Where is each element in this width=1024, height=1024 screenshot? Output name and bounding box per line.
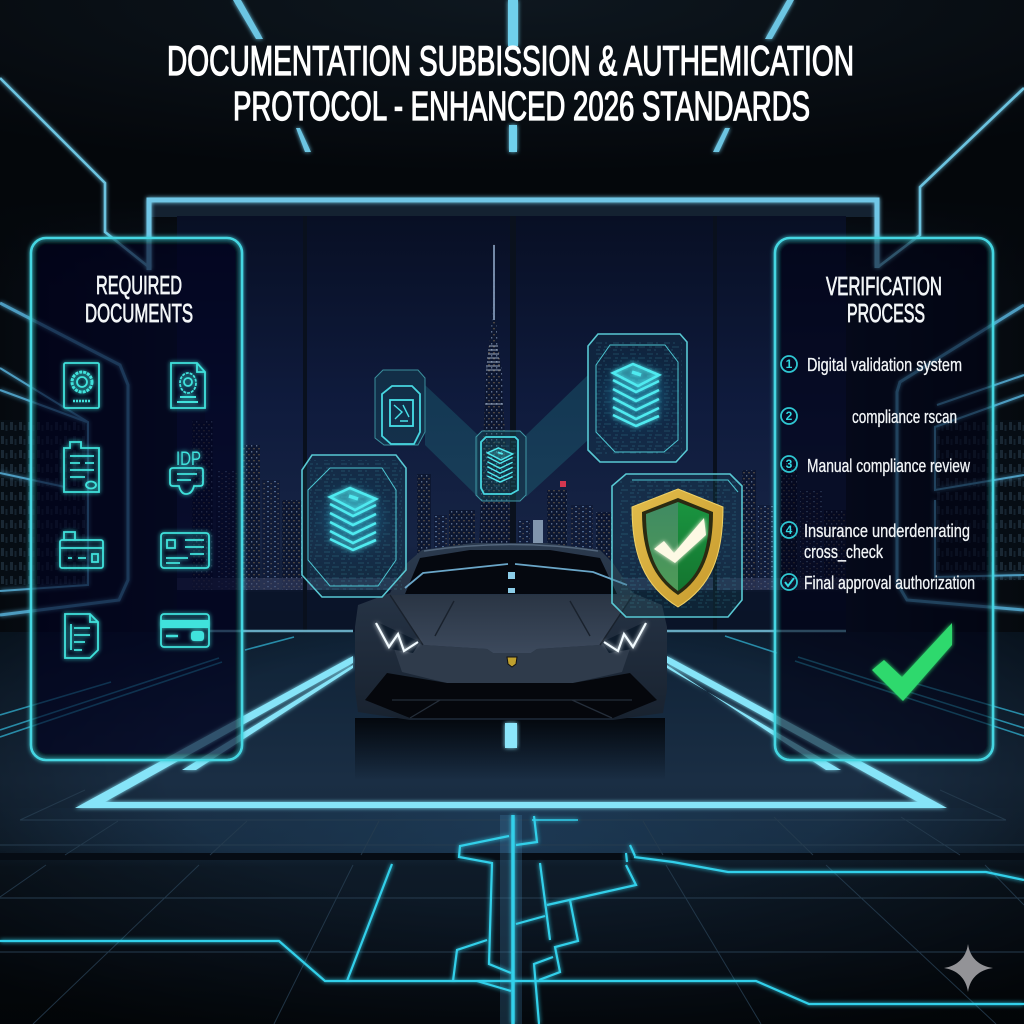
hologram: top right stack panel [588,334,687,462]
icon: id document [171,363,205,408]
icon: green check [872,623,952,701]
windshield [405,550,617,594]
left headlight [375,621,420,653]
step 5: Final approval authorization [804,573,975,593]
hologram beams [425,375,588,497]
hologram: shield panel [612,474,742,617]
step 4: cross_check [804,542,884,563]
city skyline [192,405,846,590]
document icons [60,363,209,658]
floor circuit lines [0,815,1024,1024]
emblem [507,657,517,667]
step 2: compliance rscan [852,407,957,427]
icon: licence card [161,533,209,568]
nose [387,628,637,683]
heading: verification process [826,271,942,328]
heading: verification process: PROCESS [847,298,925,328]
top window frame light [149,200,877,270]
parking frame on floor [75,656,947,808]
hood [390,595,633,653]
centre floor dash [505,723,517,748]
icon: contract document [65,614,98,658]
step 3: 3 [786,457,793,471]
side wall light lines [0,78,1024,268]
ceiling light lines [233,0,794,152]
panel: verification process [775,238,993,760]
heading: required documents: DOCUMENTS [85,298,193,328]
heading: required documents: REQUIRED [96,270,182,300]
step 3: Manual compliance review [807,456,971,476]
icon: folder card [60,532,103,568]
sports car [355,543,667,720]
step 4 [781,521,970,563]
shield icon [632,489,723,607]
windshield reflection line [405,564,627,588]
right server wall [897,305,1024,610]
title [167,37,854,129]
floor [0,632,1024,1024]
icon: payment card [161,614,209,647]
hologram: left stack panel [302,455,406,597]
front grille [365,673,657,718]
car body [355,543,667,720]
icon: clipboard document [64,442,99,492]
panel: required documents [31,238,242,760]
hologram: small code panel [375,370,425,445]
step 2: 2 [786,409,793,423]
hood creases [390,595,633,645]
burj tower [478,240,512,570]
step 4: 4 [786,523,793,537]
heading: verification process: VERIFICATION [826,271,942,301]
floor guide lines [0,631,1024,737]
car shadow [355,718,665,780]
heading: required documents [85,270,193,328]
hologram: centre stack panel [476,431,526,501]
right headlight [602,621,647,653]
left server wall [0,303,128,615]
centre markers [508,572,515,593]
icon: IDP permit [170,449,203,494]
step 3 [781,456,971,476]
step 4: Insurance underdenrating [804,521,970,541]
roof highlight [424,544,598,551]
icon: IDP permit: IDP [176,449,201,470]
night city window [177,216,846,636]
step 1: 1 [786,357,793,371]
icon: sparkle watermark [944,944,993,992]
step 2 [781,407,957,427]
icon: passport [64,363,99,408]
grille trim [392,700,632,718]
step 1: Digital validation system [807,355,962,375]
